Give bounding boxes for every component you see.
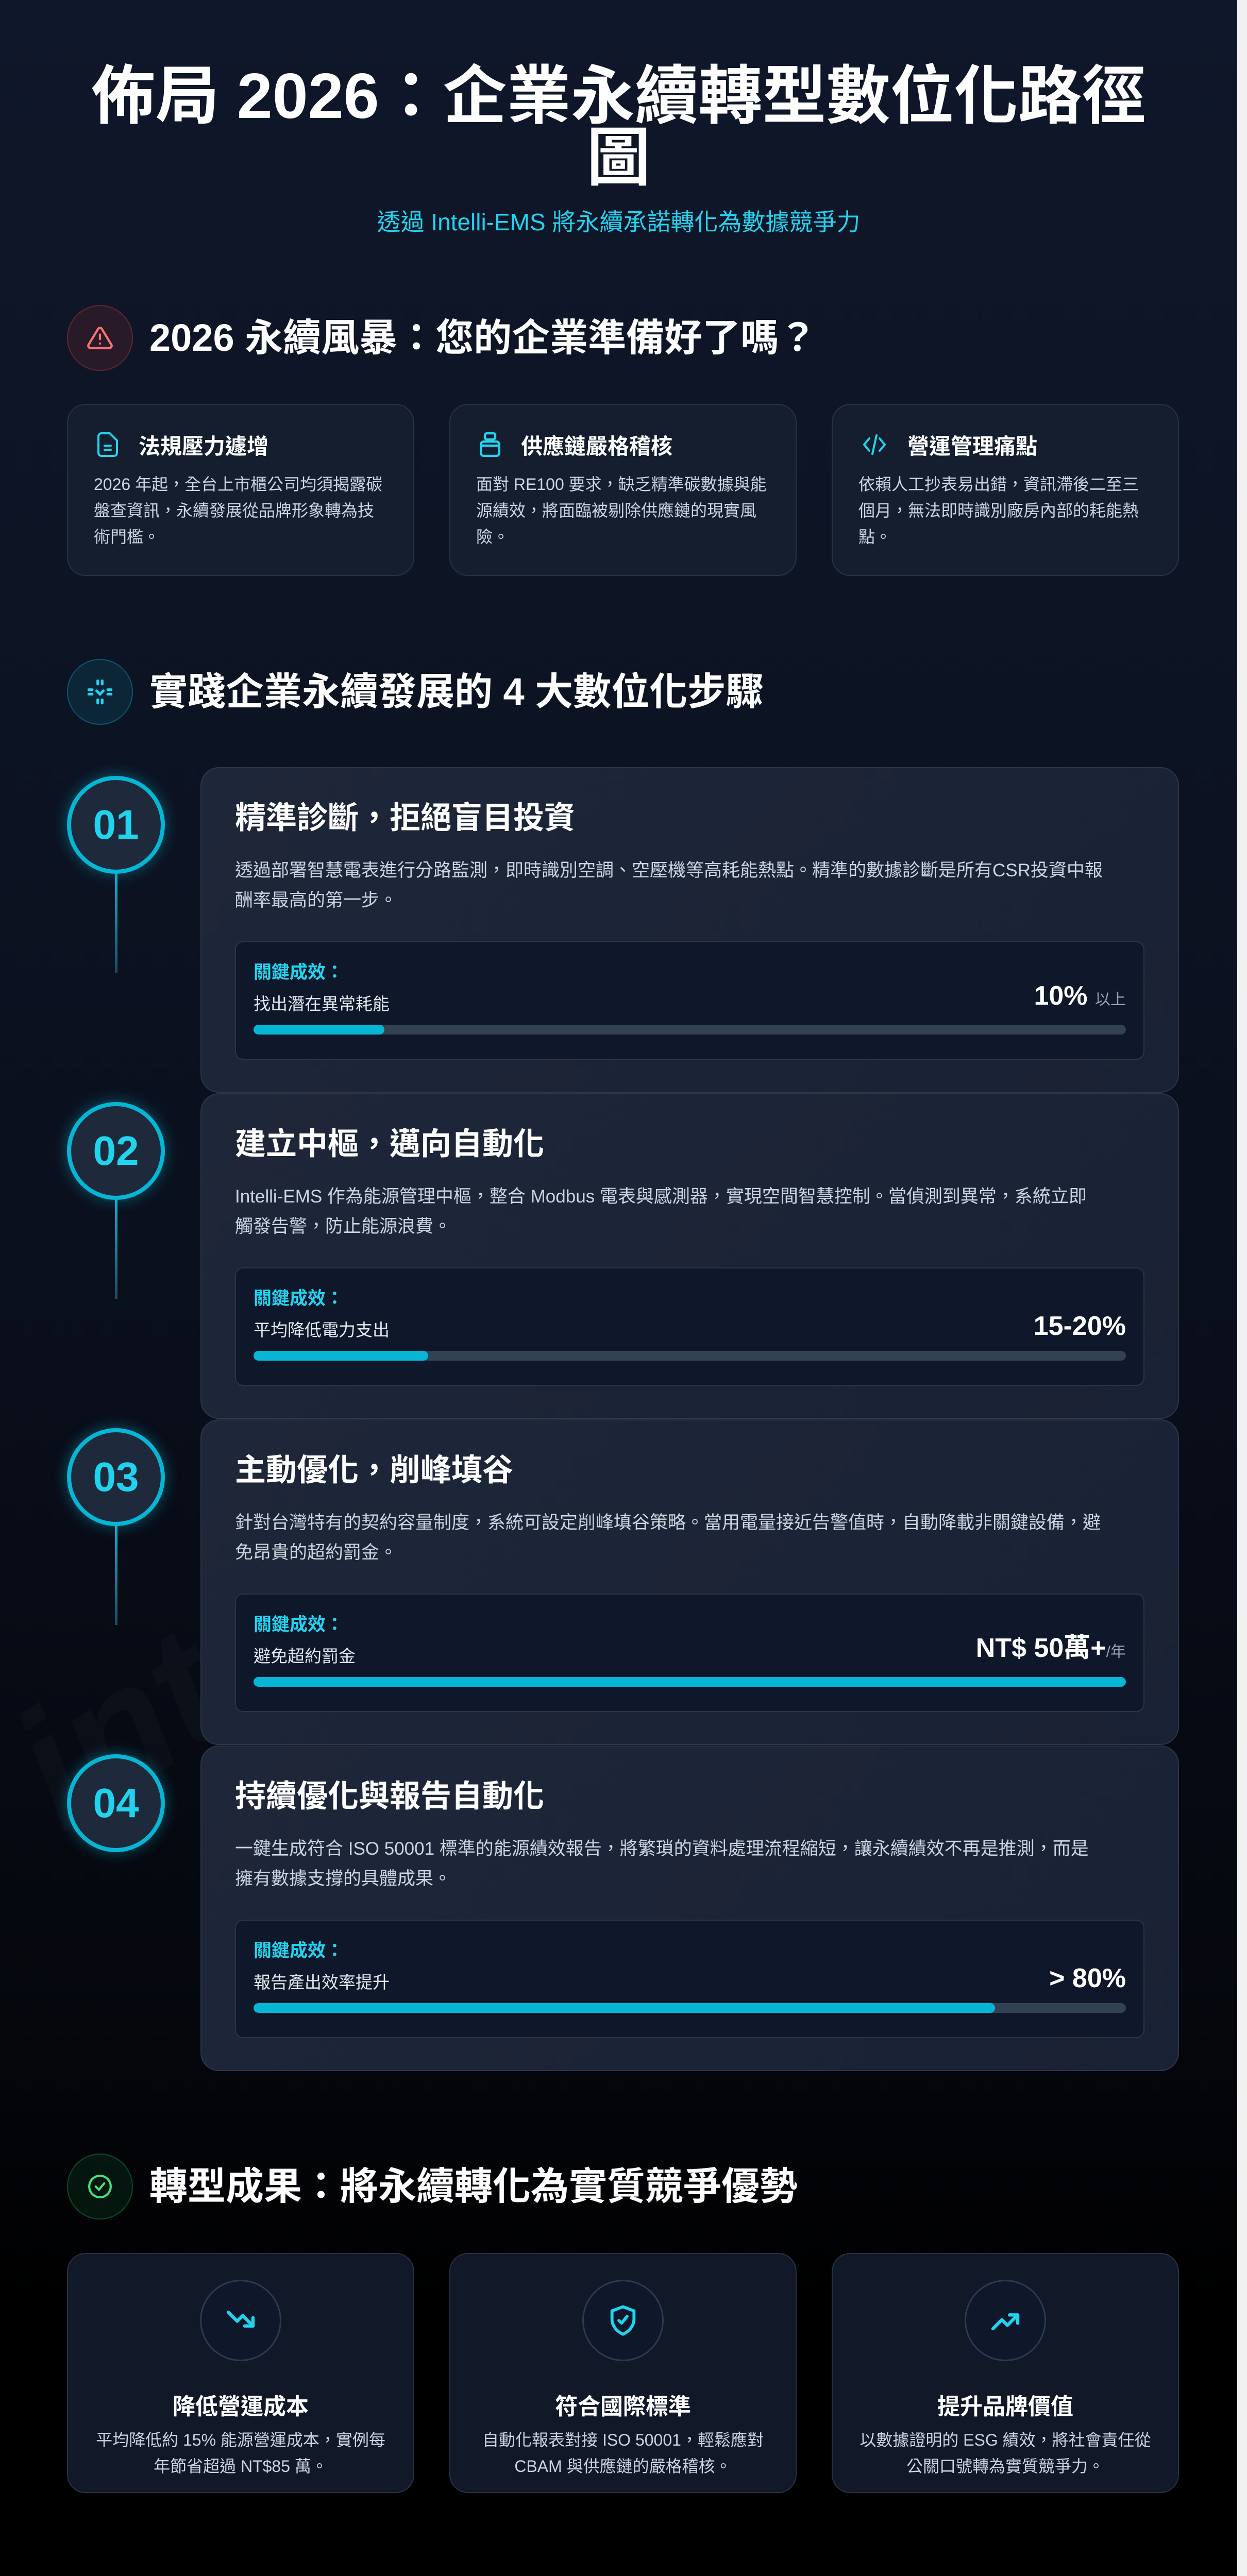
panel: regulation: 術門檻。 bbox=[94, 528, 160, 546]
panel: regulation: 2026 年起，全台上市櫃公司均須揭露碳 bbox=[94, 475, 382, 494]
key result 3: 關鍵成效： bbox=[254, 1615, 344, 1635]
panel: brand: 公關口號轉為實質競爭力。 bbox=[906, 2457, 1104, 2476]
step 2 card: 觸發告警，防止能源浪費。 bbox=[235, 1216, 451, 1236]
step 3 card bbox=[200, 1419, 1179, 1745]
key result 1: 找出潛在異常耗能 bbox=[254, 994, 390, 1013]
section heading: results: 轉型成果：將永續轉化為實質競爭優勢 bbox=[149, 2165, 798, 2208]
panel: regulation: 盤查資訊，永續發展從品牌形象轉為技 bbox=[94, 501, 374, 520]
panel: management: 點。 bbox=[858, 528, 891, 546]
step 3 marker bbox=[67, 1428, 165, 1526]
key result 2 bbox=[235, 1267, 1144, 1386]
panel: regulation: 法規壓力遽增 bbox=[139, 434, 268, 459]
key result 1 bbox=[235, 941, 1144, 1060]
step 3 card: 針對台灣特有的契約容量制度，系統可設定削峰填谷策略。當用電量接近告警值時，自動降載非關鍵設備，避 bbox=[235, 1513, 1101, 1533]
panel: cost: 平均降低約 15% 能源營運成本，實例每 bbox=[96, 2431, 385, 2449]
panel: supply chain: 源績效，將面臨被剔除供應鏈的現實風 bbox=[476, 501, 756, 520]
step 3 marker: 03 bbox=[93, 1454, 139, 1500]
key result 1: 關鍵成效： bbox=[254, 962, 344, 982]
step 3 card: 主動優化，削峰填谷 bbox=[235, 1453, 513, 1487]
step 2 card: 建立中樞，邁向自動化 bbox=[235, 1127, 544, 1161]
panel: management bbox=[832, 404, 1179, 576]
title bbox=[91, 61, 1146, 194]
icon: check bbox=[67, 2154, 133, 2219]
step 2 card: Intelli-EMS 作為能源管理中樞，整合 Modbus 電表與感測器，實現空間智慧控制。當偵測到異常，系統立即 bbox=[235, 1187, 1087, 1207]
key result 2: 關鍵成效： bbox=[254, 1289, 344, 1309]
section heading: 2026 storm bbox=[67, 305, 817, 371]
key result 2: 平均降低電力支出 bbox=[254, 1320, 390, 1340]
key result 4: 報告產出效率提升 bbox=[254, 1973, 390, 1992]
key result 3: NT$ 50萬+/年 bbox=[976, 1633, 1126, 1663]
panel: management: 依賴人工抄表易出錯，資訊滯後二至三 bbox=[858, 475, 1139, 494]
key result 1: 10% 以上 bbox=[1034, 981, 1126, 1011]
step 4 card: 一鍵生成符合 ISO 50001 標準的能源績效報告，將繁瑣的資料處理流程縮短，讓永續績效不再是推測，而是 bbox=[235, 1839, 1089, 1859]
panel: supply chain: 供應鏈嚴格稽核 bbox=[521, 434, 672, 459]
step 4 card: 擁有數據支撐的具體成果。 bbox=[235, 1869, 451, 1889]
key result 3 bbox=[235, 1594, 1144, 1712]
panel: cost bbox=[67, 2253, 414, 2493]
section heading: results bbox=[67, 2154, 798, 2219]
section heading: 2026 storm: 2026 永續風暴：您的企業準備好了嗎？ bbox=[149, 316, 817, 359]
panel: supply chain: 險。 bbox=[476, 528, 509, 546]
panel: cost: 年節省超過 NT$85 萬。 bbox=[154, 2457, 328, 2476]
step 1 marker: 01 bbox=[93, 802, 139, 848]
step 1 card: 酬率最高的第一步。 bbox=[235, 890, 397, 910]
key result 4: 關鍵成效： bbox=[254, 1941, 344, 1961]
title: 圖 bbox=[586, 123, 650, 194]
panel: management: 營運管理痛點 bbox=[907, 434, 1037, 459]
step 4 card: 持續優化與報告自動化 bbox=[235, 1779, 544, 1814]
key result 4: > 80% bbox=[1049, 1963, 1126, 1993]
step 2 marker: 02 bbox=[93, 1128, 139, 1174]
step 4 card bbox=[200, 1745, 1179, 2071]
panel: standards bbox=[449, 2253, 797, 2493]
step 3 card: 免昂貴的超約罰金。 bbox=[235, 1543, 397, 1563]
subtitle: 透過 Intelli-EMS 將永續承諾轉化為數據競爭力 bbox=[377, 209, 860, 235]
panel: supply chain bbox=[449, 404, 797, 576]
title: 佈局 2026：企業永續轉型數位化路徑 bbox=[91, 61, 1146, 132]
panel: supply chain: 面對 RE100 要求，缺乏精準碳數據與能 bbox=[476, 475, 767, 494]
panel: brand: 以數據證明的 ESG 績效，將社會責任從 bbox=[860, 2431, 1151, 2449]
step 1 card: 精準診斷，拒絕盲目投資 bbox=[235, 801, 575, 835]
key result 3: 避免超約罰金 bbox=[254, 1647, 356, 1666]
step 1 card: 透過部署智慧電表進行分路監測，即時識別空調、空壓機等高耗能熱點。精準的數據診斷是所有CSR投資中報 bbox=[235, 860, 1103, 880]
icon: warning bbox=[67, 305, 133, 371]
panel: brand: 提升品牌價值 bbox=[937, 2394, 1073, 2419]
section heading: 4 steps: 實踐企業永續發展的 4 大數位化步驟 bbox=[149, 670, 764, 713]
key result 4 bbox=[235, 1920, 1144, 2038]
panel: standards: 符合國際標準 bbox=[555, 2394, 691, 2419]
step 4 marker: 04 bbox=[93, 1780, 139, 1826]
panel: regulation bbox=[67, 404, 414, 576]
panel: standards: CBAM 與供應鏈的嚴格稽核。 bbox=[514, 2457, 732, 2476]
panel: brand bbox=[832, 2253, 1179, 2493]
icon: steps bbox=[67, 659, 133, 725]
panel: standards: 自動化報表對接 ISO 50001，輕鬆應對 bbox=[482, 2431, 764, 2449]
step 2 marker bbox=[67, 1102, 165, 1200]
step 1 marker bbox=[67, 776, 165, 874]
step 4 marker bbox=[67, 1754, 165, 1852]
step 2 card bbox=[200, 1093, 1179, 1419]
key result 2: 15-20% bbox=[1034, 1311, 1126, 1341]
panel: management: 個月，無法即時識別廠房內部的耗能熱 bbox=[858, 501, 1139, 520]
step 1 card bbox=[200, 767, 1179, 1093]
section heading: 4 steps bbox=[67, 659, 764, 725]
panel: cost: 降低營運成本 bbox=[173, 2394, 309, 2419]
